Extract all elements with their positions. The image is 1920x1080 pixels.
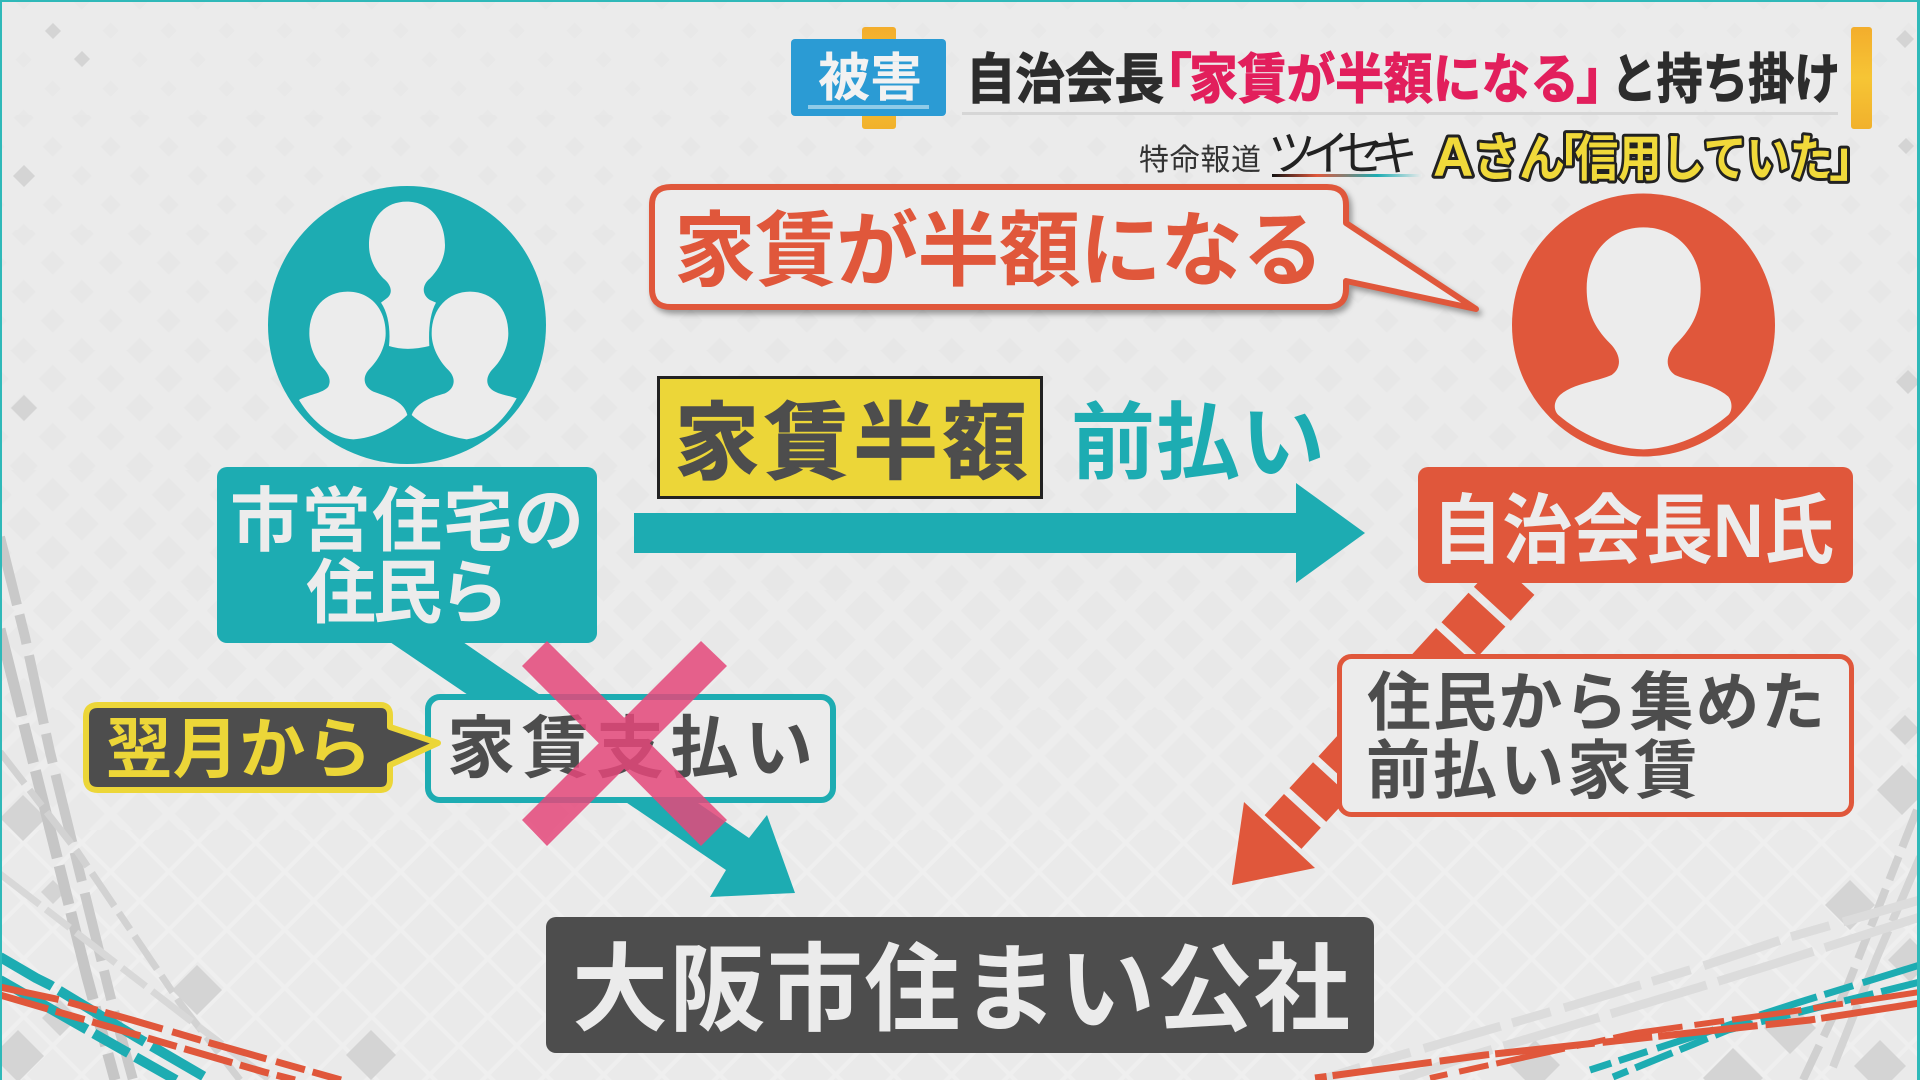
tag: 家賃半額: 家賃半額 bbox=[675, 396, 1027, 490]
program logo: 特命報道 ツイセキ: ツイセキ bbox=[1268, 128, 1418, 181]
front left figure bbox=[299, 292, 407, 439]
note box: 住民から集めた前払い家賃: 前払い家賃 bbox=[1366, 735, 1698, 807]
tag: 翌月から: 翌月から bbox=[106, 712, 372, 786]
headline: 家賃が半額になる bbox=[1189, 50, 1579, 110]
label: 前払い: 前払い bbox=[1071, 396, 1325, 490]
note box: 住民から集めた前払い家賃: 住民から集めた bbox=[1367, 667, 1825, 739]
headline: 「 bbox=[1138, 50, 1192, 110]
label: 市営住宅の住民ら: 市営住宅の bbox=[230, 482, 584, 560]
label: 市営住宅の住民ら bbox=[217, 467, 597, 643]
cross mark bbox=[522, 641, 727, 846]
label: 自治会長N氏 bbox=[1418, 467, 1853, 583]
decorative lines: lower right bbox=[1315, 810, 1920, 1080]
back figure bbox=[369, 202, 445, 349]
box: 大阪市住まい公社: 大阪市住まい公社 bbox=[572, 937, 1350, 1044]
arrow: residents to chairman bbox=[634, 483, 1365, 583]
subtitle: Aさん「信用していた」: A bbox=[1433, 125, 1473, 188]
headline: と持ち掛け bbox=[1611, 50, 1840, 110]
headline bbox=[966, 50, 1840, 110]
subtitle: Aさん「信用していた」: さん bbox=[1473, 131, 1565, 187]
program logo: 特命報道 ツイセキ: 特命報道 bbox=[1139, 144, 1261, 177]
label: 市営住宅の住民ら: 住民ら bbox=[306, 554, 509, 632]
headline underline bbox=[962, 112, 1838, 115]
program logo: 特命報道 ツイセキ bbox=[1139, 128, 1422, 181]
speech bubble: 家賃が半額になる bbox=[652, 187, 1476, 309]
headline: 自治会長 bbox=[966, 50, 1164, 110]
box: 家賃支払い bbox=[428, 697, 833, 800]
decorative lines: lower left bbox=[0, 537, 341, 1080]
subtitle: Aさん「信用していた」: 「 bbox=[1534, 131, 1584, 187]
note box: 住民から集めた前払い家賃 bbox=[1340, 656, 1852, 814]
tag: 被害 bbox=[791, 39, 946, 116]
title bar bbox=[791, 27, 1872, 129]
subtitle: Aさん「信用していた」 bbox=[1433, 125, 1879, 188]
front right figure bbox=[412, 292, 517, 439]
headline: 」 bbox=[1576, 50, 1630, 110]
speech bubble: 家賃が半額になる: 家賃が半額になる bbox=[674, 206, 1324, 297]
arrow: chairman to housing corporation (dashed) bbox=[1232, 578, 1516, 885]
tag: 被害: 被害 bbox=[818, 50, 922, 108]
arrow: residents to housing corporation (crossed out) bbox=[387, 640, 795, 897]
subtitle: Aさん「信用していた」: 」 bbox=[1829, 131, 1879, 187]
person icon: chairman bbox=[1512, 194, 1775, 456]
right orange bar bbox=[1851, 27, 1872, 129]
tag backing orange bbox=[862, 27, 896, 129]
box: 家賃支払い: 家賃支払い bbox=[447, 711, 813, 787]
label: 自治会長N氏: 自治会長N氏 bbox=[1432, 489, 1834, 574]
subtitle: Aさん「信用していた」: 信用していた bbox=[1575, 131, 1833, 187]
tag: 翌月から bbox=[86, 705, 438, 790]
person icon: residents bbox=[268, 186, 546, 464]
